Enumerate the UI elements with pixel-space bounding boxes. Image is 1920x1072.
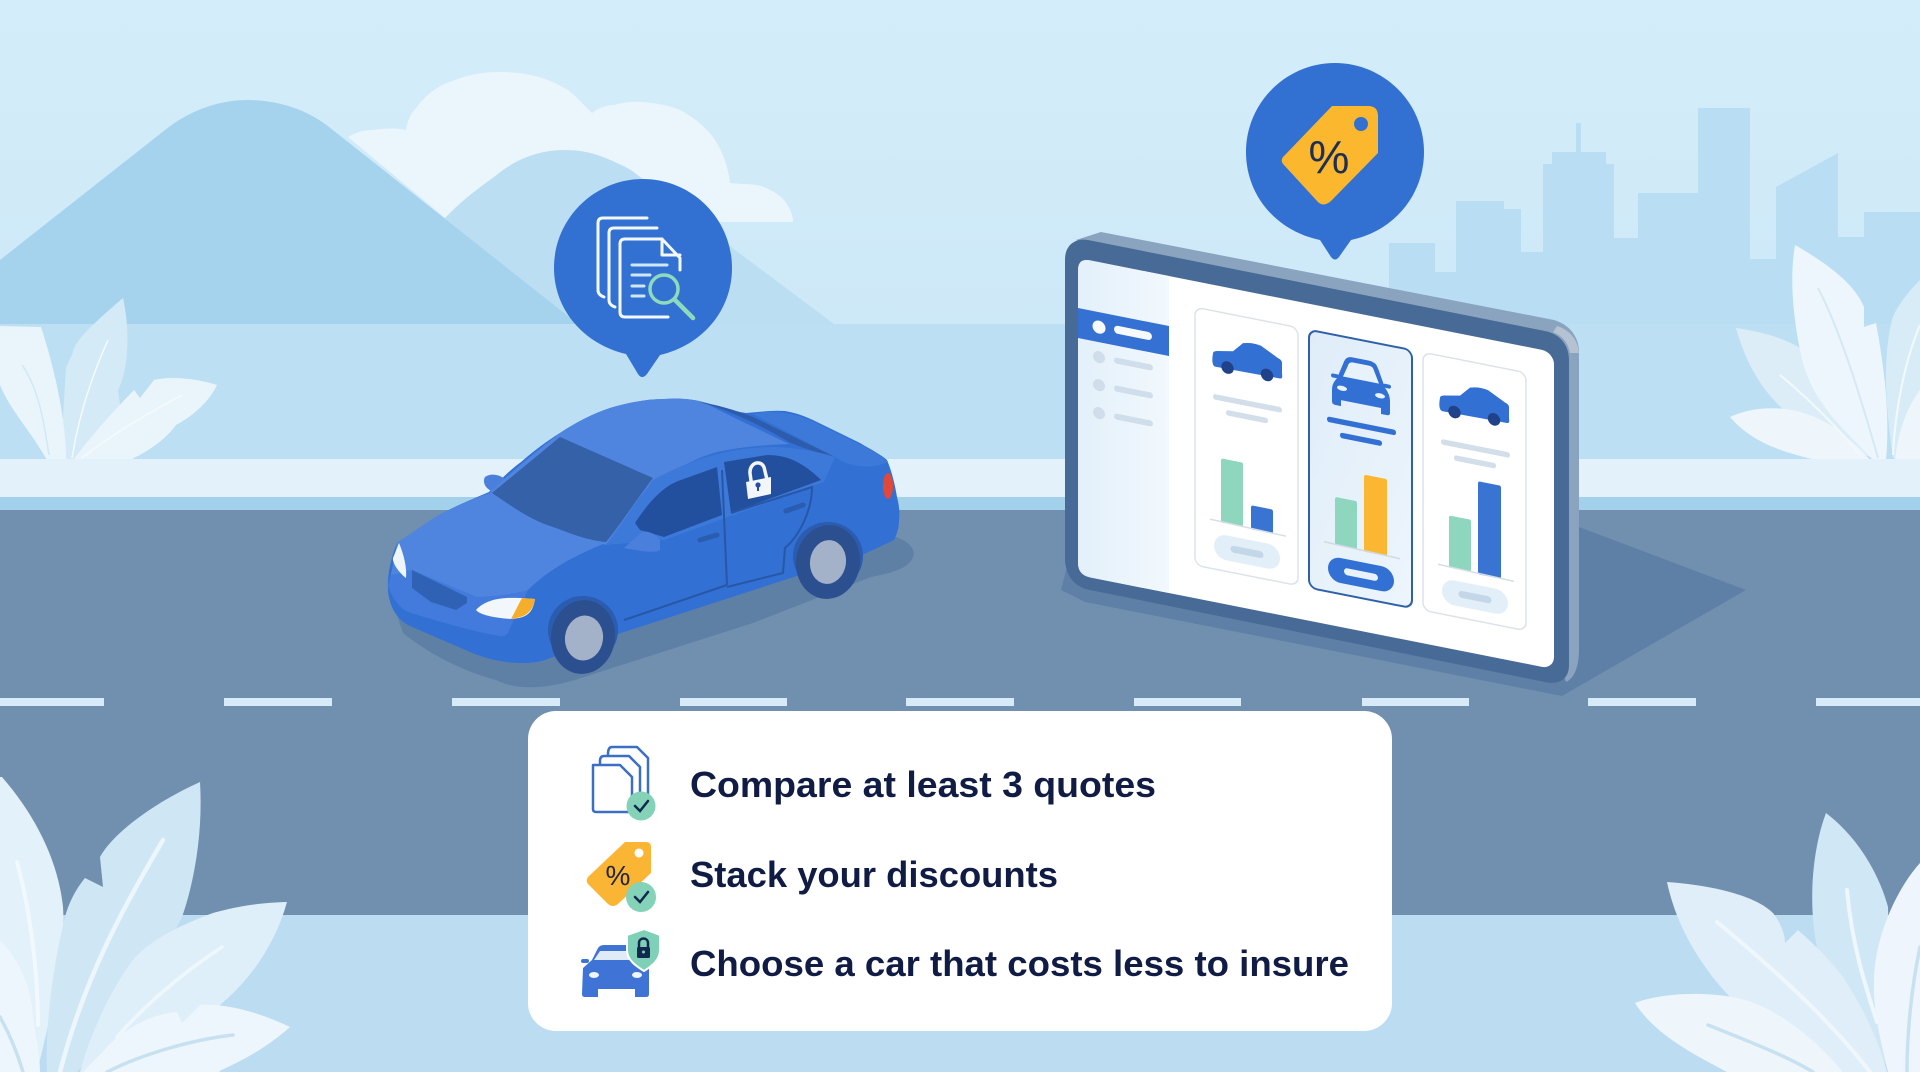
rear deck highlight — [753, 412, 888, 467]
tip 3 text: Choose a car that costs less to insure — [690, 943, 1349, 984]
left mirror — [484, 475, 506, 492]
bar chart — [1438, 473, 1514, 581]
tablet screen, skewed — [1078, 258, 1554, 669]
tip 2 text: Stack your discounts — [690, 854, 1058, 895]
ground foreground — [0, 915, 1920, 1072]
quote card 1 — [1195, 307, 1298, 586]
bar chart — [1324, 467, 1400, 559]
road lane dashes — [0, 698, 1920, 706]
icon: text lines — [632, 265, 667, 296]
comparison tablet — [1065, 232, 1579, 683]
plant: bottom left — [0, 777, 290, 1072]
percent sign: % — [1309, 131, 1349, 183]
plant: bottom right — [1635, 813, 1920, 1072]
tail light — [883, 473, 893, 499]
rear wheel — [791, 521, 865, 603]
grille — [412, 570, 467, 610]
tips card — [528, 711, 1392, 1031]
icon: magnifier — [650, 275, 693, 318]
roof and pillars — [490, 399, 789, 545]
bubble: document search — [554, 179, 732, 377]
tablet outer light bezel — [1076, 232, 1579, 682]
cloud — [348, 72, 793, 222]
plant: middle right — [1730, 245, 1920, 459]
sidebar selected row — [1078, 308, 1169, 356]
front side window — [635, 467, 722, 537]
sidebar — [1078, 258, 1169, 593]
rear side window — [724, 455, 821, 513]
door lines and handles — [624, 470, 812, 620]
bubble: discount tag — [1246, 63, 1424, 260]
bar chart — [1210, 456, 1286, 536]
side upper trim — [606, 447, 835, 545]
screen background — [1078, 258, 1554, 669]
icon: discount tag with check: % — [606, 860, 630, 891]
quote card 3 — [1423, 352, 1526, 631]
icon: car with shield — [581, 929, 660, 997]
road — [0, 510, 1920, 915]
car icon — [1212, 335, 1282, 385]
quote card 2, selected — [1309, 330, 1412, 608]
icon: discount tag with check — [587, 842, 656, 912]
large mountain — [0, 100, 578, 324]
car — [388, 399, 899, 678]
car shadow — [397, 500, 914, 687]
plant: middle left — [0, 298, 217, 460]
sidewalk band — [0, 459, 1920, 497]
card background — [528, 711, 1392, 1031]
front wheel — [546, 596, 620, 678]
tablet corner highlight — [1553, 326, 1579, 353]
left headlight — [393, 543, 406, 578]
front car icon — [1331, 353, 1391, 416]
rear window sliver — [699, 402, 835, 457]
icon: documents — [598, 218, 680, 317]
sidebar menu items — [1093, 350, 1153, 430]
right headlight — [476, 598, 535, 619]
hood — [391, 492, 606, 597]
windshield — [492, 437, 653, 542]
car icon — [1439, 380, 1509, 429]
tablet shadow — [1061, 527, 1746, 696]
small mountain — [340, 150, 834, 324]
right mirror — [624, 532, 660, 552]
tip 1 text: Compare at least 3 quotes — [690, 764, 1156, 805]
front bumper — [388, 565, 528, 636]
lower background band — [0, 324, 1920, 459]
tablet dark frame — [1065, 240, 1569, 683]
car body — [388, 399, 899, 663]
turn signal — [511, 598, 535, 619]
city skyline — [1389, 108, 1920, 324]
padlock on window — [746, 462, 771, 499]
icon: price tag — [1282, 106, 1378, 204]
curb band — [0, 497, 1920, 510]
icon: quote documents with check — [593, 747, 656, 820]
background sky — [0, 0, 1920, 324]
